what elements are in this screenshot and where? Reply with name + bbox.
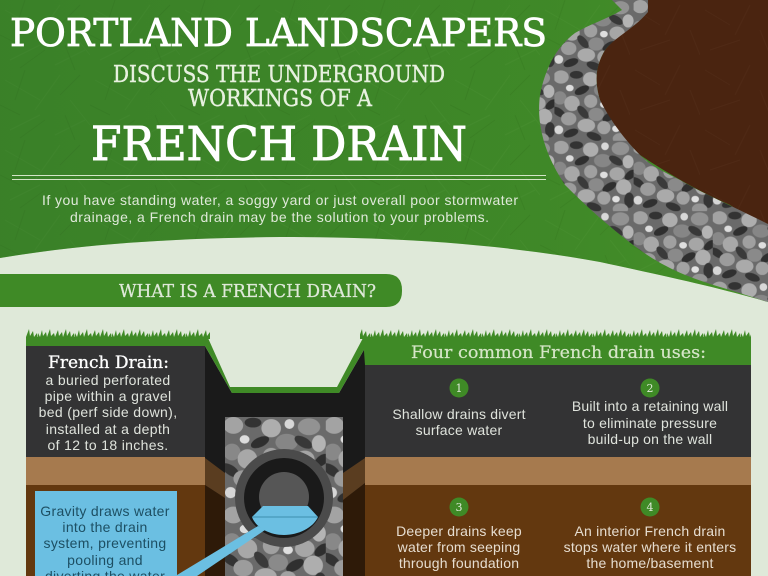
- title: Portland Landscapers: PORTLAND LANDSCAPERS: [10, 11, 547, 55]
- definition text: pipe within a gravel: [45, 388, 171, 404]
- item 2: [572, 378, 728, 447]
- callout text: Gravity draws water: [40, 503, 170, 519]
- callout text: into the drain: [62, 519, 148, 535]
- grass blades left: [26, 329, 210, 339]
- trench black soil: [205, 346, 365, 576]
- green header strip: [363, 337, 751, 365]
- dark soil layer: [365, 365, 751, 457]
- green strip left: [26, 337, 206, 346]
- item 4: An interior French drain: [574, 523, 726, 539]
- item 2: 2: [646, 382, 654, 395]
- brown mulch bed: [597, 0, 768, 230]
- callout text: pooling and: [67, 552, 143, 568]
- brown soil layer: [26, 485, 205, 576]
- item 1: [392, 378, 526, 438]
- item 3: 3: [456, 501, 462, 514]
- item 3: through foundation: [399, 555, 519, 571]
- perforated pipe: [235, 449, 333, 547]
- definition text: installed at a depth: [46, 421, 170, 437]
- callout box: [35, 491, 177, 576]
- item 4: the home/basement: [586, 555, 714, 571]
- item 3: [396, 498, 522, 571]
- item 1: surface water: [416, 422, 502, 438]
- item 4: [564, 498, 736, 571]
- subtitle line two: WORKINGS OF A: [188, 86, 372, 112]
- title: French Drain: FRENCH DRAIN: [91, 117, 467, 172]
- definition text: [39, 372, 177, 453]
- callout text: [40, 503, 170, 576]
- gravel bed: [225, 417, 343, 576]
- panel: four common uses: [360, 329, 751, 576]
- tan soil layer: [26, 457, 205, 485]
- gravel path: [539, 0, 768, 302]
- item 1: 1: [456, 382, 462, 395]
- definition text: of 12 to 18 inches.: [47, 437, 169, 453]
- tan soil layer: [365, 457, 751, 485]
- panel: French Drain definition: [26, 329, 210, 576]
- item 1: Shallow drains divert: [392, 406, 526, 422]
- heading: French Drain: French Drain:: [48, 353, 169, 373]
- definition text: bed (perf side down),: [39, 404, 177, 420]
- intro text: drainage, a French drain may be the solution to your problems.: [70, 209, 489, 225]
- item 4: stops water where it enters: [564, 539, 736, 555]
- item 2: build-up on the wall: [588, 431, 712, 447]
- trench side bands: [205, 458, 365, 576]
- header grass area: [0, 0, 768, 302]
- callout text: system, preventing: [44, 535, 166, 551]
- header grass shading: [0, 0, 768, 302]
- item 2: Built into a retaining wall: [572, 398, 728, 414]
- intro text: If you have standing water, a soggy yard or just overall poor stormwater: [42, 192, 518, 208]
- dark soil layer: [26, 346, 205, 457]
- item 3: water from seeping: [397, 539, 520, 555]
- section heading pill: WHAT IS A FRENCH DRAIN?: [119, 281, 376, 302]
- item 4: 4: [646, 501, 654, 514]
- item 2: to eliminate pressure: [583, 415, 717, 431]
- double rule: [12, 176, 546, 180]
- callout: gravity: [35, 491, 265, 576]
- item 3: Deeper drains keep: [396, 523, 522, 539]
- green ground line: [205, 338, 365, 393]
- subtitle line one: DISCUSS THE UNDERGROUND: [113, 62, 445, 88]
- heading: Four common French drain uses:: [411, 343, 706, 362]
- callout pointer: [177, 526, 265, 576]
- section heading pill: [0, 274, 402, 307]
- definition text: a buried perforated: [46, 372, 170, 388]
- cross-section trench: [205, 338, 365, 576]
- brown soil layer: [365, 485, 751, 576]
- intro text: [42, 192, 518, 225]
- grass blades right: [360, 329, 751, 339]
